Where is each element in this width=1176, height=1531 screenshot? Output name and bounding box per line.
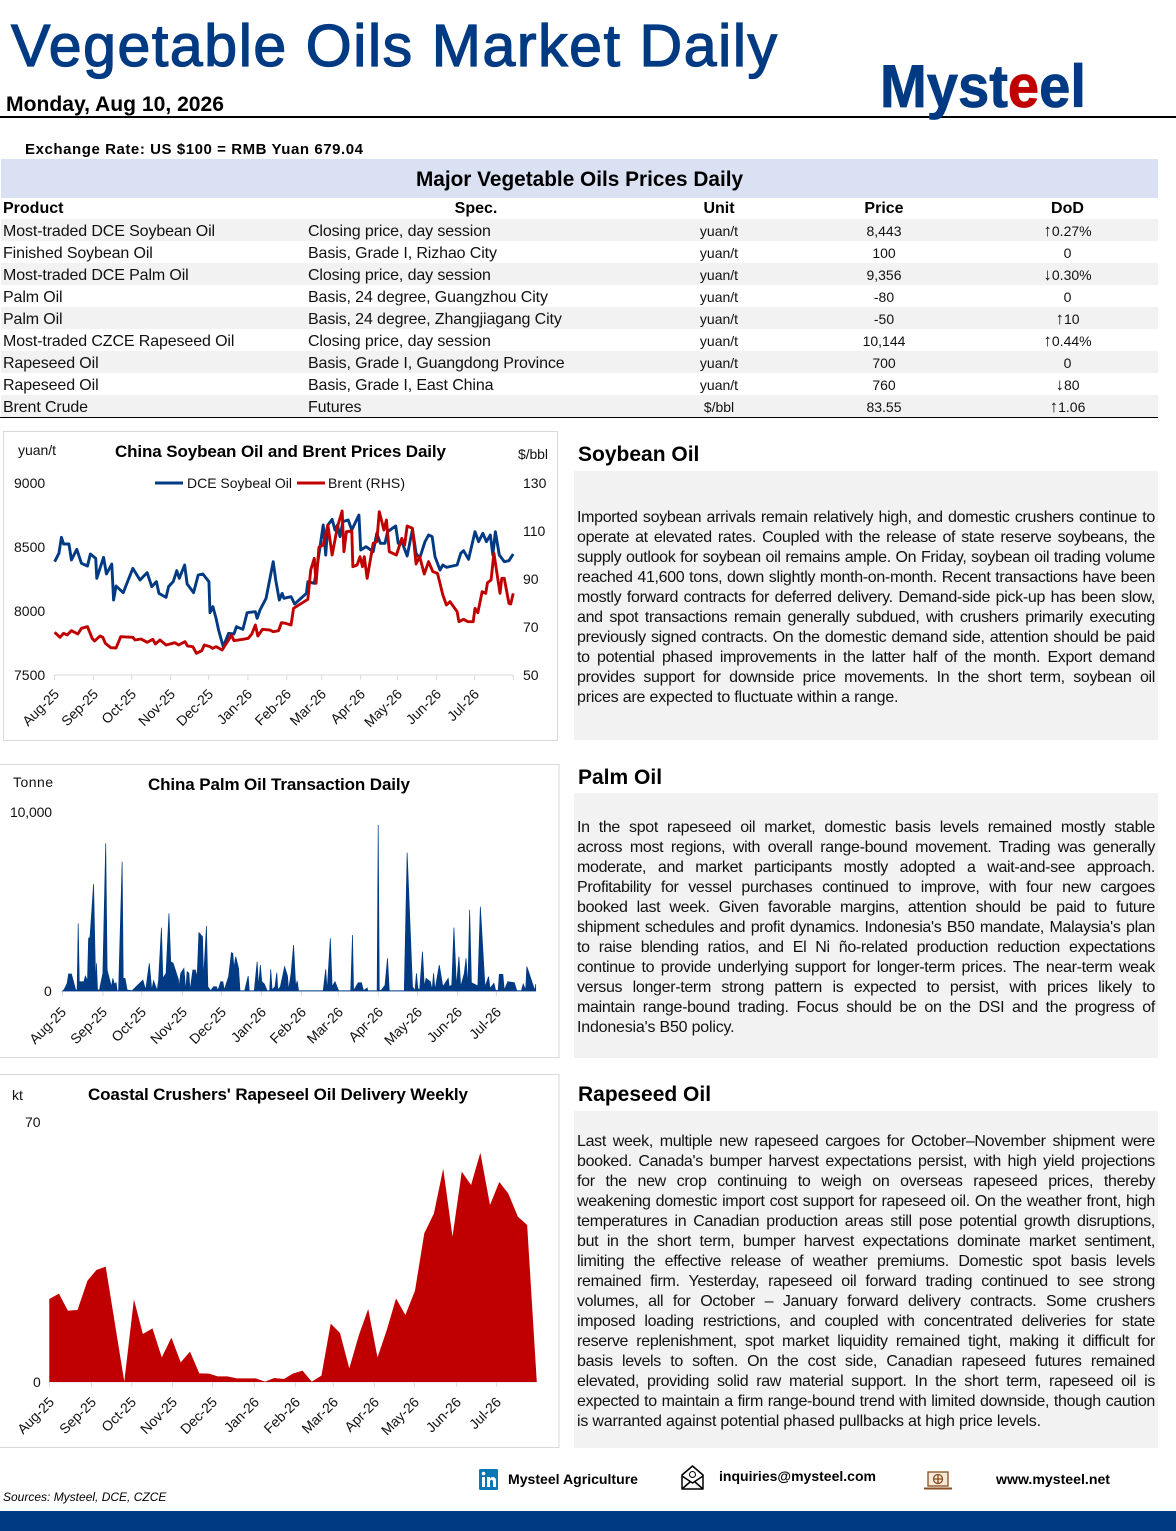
text block: Palm Oil commentary: booked last week. Given favorable margins, attention should be paid to future [577, 899, 1155, 916]
chart: China Palm Oil Transaction Daily [0, 764, 560, 1058]
text block: Soybean Oil commentary: operate at elevated rates. Coupled with the release of state reserve soybeans, the [577, 529, 1155, 546]
text block: Palm Oil commentary: across most regions, with overall range-bound movement. Trading was generally [577, 839, 1155, 856]
footer bar [0, 1511, 1176, 1531]
text block: Palm Oil commentary: continue to provide underlying support for longer-term prices. The near-term weak [577, 959, 1155, 976]
chart: China Soybean Oil and Brent Prices Daily: China Soybean Oil and Brent Prices Daily [115, 442, 447, 461]
text block: Rapeseed Oil commentary: but in the short term, bumper harvest expectations dominate market sentiment, [577, 1233, 1155, 1250]
price table: yuan/t [700, 377, 738, 393]
chart: Coastal Crushers' Rapeseed Oil Delivery Weekly: Jul-26 [466, 1394, 504, 1432]
panel: Palm Oil commentary background [574, 793, 1158, 1058]
chart: China Soybean Oil and Brent Prices Daily: Jan-26 [214, 686, 255, 727]
text block: Soybean Oil commentary: prices are expected to fluctuate within a range. [577, 689, 898, 706]
price table: Basis, Grade I, East China [308, 377, 493, 394]
panel: price table heading [1, 159, 1158, 198]
price table: Spec. [455, 200, 497, 217]
chart: China Soybean Oil and Brent Prices Daily: 130 [523, 475, 547, 491]
chart: Coastal Crushers' Rapeseed Oil Delivery Weekly: kt [12, 1087, 23, 1103]
chart: China Soybean Oil and Brent Prices Daily: Dec-25 [173, 686, 216, 729]
text block: Rapeseed Oil commentary: reserve replenishment, spot market liquidity remained tight, making it difficult for [577, 1333, 1155, 1350]
text: email address: inquiries@mysteel.com [719, 1468, 876, 1484]
header [0, 13, 1176, 120]
price table: 700 [872, 355, 896, 371]
price table: ↑0.27% [1043, 221, 1092, 240]
price table: yuan/t [700, 333, 738, 349]
chart: Coastal Crushers' Rapeseed Oil Delivery Weekly: Dec-25 [177, 1394, 220, 1437]
heading: Palm Oil: Palm Oil [578, 766, 662, 789]
price table: ↑10 [1055, 309, 1080, 328]
price table: Basis, Grade I, Guangdong Province [308, 355, 565, 372]
table bottom rule [0, 417, 1158, 418]
price table: Closing price, day session [308, 267, 491, 284]
sources note: Sources: Mysteel, DCE, CZCE [3, 1490, 166, 1504]
text block: Rapeseed Oil commentary: remained firm. Yesterday, rapeseed oil forward trading continued to see strong [577, 1273, 1155, 1290]
chart: Coastal Crushers' Rapeseed Oil Delivery Weekly [0, 1074, 560, 1448]
text block: Rapeseed Oil commentary: limiting the effective release of weather premiums. Domestic spot basis levels [577, 1253, 1155, 1270]
price table: 0 [1064, 289, 1071, 305]
price table: Most-traded DCE Palm Oil [3, 267, 189, 284]
text block: Soybean Oil commentary: Imported soybean arrivals remain relatively high, and domestic crushers continue to [577, 509, 1155, 526]
chart: China Soybean Oil and Brent Prices Daily: Aug-25 [19, 686, 62, 729]
text block: Palm Oil commentary: versus longer-term strong pattern is expected to persist, with prices likely to [577, 979, 1155, 996]
chart: China Soybean Oil and Brent Prices Daily: Feb-26 [251, 686, 294, 728]
price table: 10,144 [863, 333, 905, 349]
chart: Coastal Crushers' Rapeseed Oil Delivery Weekly: Mar-26 [298, 1394, 341, 1436]
text block: Soybean Oil commentary: to potential phased improvements in the latter half of the month. Export demand [577, 649, 1155, 666]
text block: Palm Oil commentary: Indonesia's B50 policy. [577, 1019, 734, 1036]
price table: ↑0.44% [1043, 331, 1092, 350]
chart: China Palm Oil Transaction Daily: Tonne [13, 774, 53, 790]
text block: Rapeseed Oil commentary: Last week, multiple new rapeseed cargoes for October–November shipment were [577, 1133, 1155, 1150]
price table: 100 [872, 245, 896, 261]
chart: Coastal Crushers' Rapeseed Oil Delivery Weekly: Nov-25 [137, 1394, 180, 1437]
chart: China Soybean Oil and Brent Prices Daily: Jun-26 [403, 686, 444, 727]
price table: 9,356 [866, 267, 902, 283]
panel: Soybean Oil commentary background [574, 471, 1158, 740]
chart: China Palm Oil Transaction Daily: Aug-25 [26, 1004, 69, 1047]
chart: Coastal Crushers' Rapeseed Oil Delivery Weekly: Feb-26 [260, 1394, 303, 1436]
price table: Rapeseed Oil [3, 355, 99, 372]
text block: Soybean Oil commentary: provides support for downside price movements. In the short term, soybean oil [577, 669, 1155, 686]
chart: China Soybean Oil and Brent Prices Daily: Sep-25 [58, 686, 101, 729]
price table: 760 [872, 377, 896, 393]
text block: Palm Oil commentary: Profitability for vessel purchases continued to improve, with four new cargoes [577, 879, 1155, 896]
text block: Palm Oil commentary: to raise blending ratios, and El Ni ño-related production reduction expectations [577, 939, 1155, 956]
price table: yuan/t [700, 289, 738, 305]
price table [1, 200, 1158, 417]
price table: 83.55 [866, 399, 902, 415]
chart: China Soybean Oil and Brent Prices Daily: Mar-26 [286, 686, 329, 728]
text block: Rapeseed Oil commentary: expected to maintain a firm range-bound trend with limited downside, though caution [577, 1393, 1155, 1410]
price table: $/bbl [704, 399, 734, 415]
date: Monday, Aug 10, 2026 [6, 93, 224, 116]
price table: Price [864, 200, 904, 217]
text block: Rapeseed Oil commentary: imposed loading restrictions, and coupled with concentrated deliveries for state [577, 1313, 1155, 1330]
price table: ↓80 [1055, 375, 1080, 394]
price table: yuan/t [700, 223, 738, 239]
chart: China Soybean Oil and Brent Prices Daily: 50 [523, 667, 539, 683]
chart: China Palm Oil Transaction Daily: Feb-26 [266, 1004, 309, 1046]
chart: China Soybean Oil and Brent Prices Daily: May-26 [361, 686, 405, 730]
text block: Rapeseed Oil commentary: volumes, all for October – January forward delivery contracts. Some crushers [577, 1293, 1155, 1310]
price table: ↑1.06 [1050, 397, 1085, 416]
text block: Soybean Oil commentary: supply outlook for soybean oil remains ample. On Friday, soybean oil trading volume [577, 549, 1155, 566]
text: website: www.mysteel.net [995, 1471, 1110, 1487]
chart: China Palm Oil Transaction Daily: Jan-26 [228, 1004, 269, 1045]
chart: Coastal Crushers' Rapeseed Oil Delivery Weekly: May-26 [378, 1394, 422, 1438]
panel: Rapeseed Oil commentary background [574, 1111, 1158, 1448]
text block: Palm Oil commentary: shipment schedules and profit dynamics. Indonesia's B50 mandate, Malaysia's plan [577, 919, 1155, 936]
chart: Coastal Crushers' Rapeseed Oil Delivery Weekly: Apr-26 [341, 1394, 382, 1435]
chart: Coastal Crushers' Rapeseed Oil Delivery Weekly: Jun-26 [423, 1394, 464, 1435]
chart: China Soybean Oil and Brent Prices Daily: Nov-25 [135, 686, 178, 729]
chart: China Palm Oil Transaction Daily: May-26 [381, 1004, 425, 1048]
header rule [0, 116, 1176, 118]
chart: China Palm Oil Transaction Daily: Jul-26 [466, 1004, 504, 1042]
text block: Rapeseed Oil commentary: is warranted against potential phased pullbacks at high price levels. [577, 1413, 1041, 1430]
text block: Palm Oil commentary: moderate, and market participants mostly adopted a wait-and-see approach. [577, 859, 1155, 876]
chart: China Palm Oil Transaction Daily: Sep-25 [67, 1004, 110, 1047]
chart: China Soybean Oil and Brent Prices Daily: 70 [523, 619, 539, 635]
price table: Most-traded CZCE Rapeseed Oil [3, 333, 234, 350]
chart: China Soybean Oil and Brent Prices Daily: 9000 [14, 475, 45, 491]
price table: Brent Crude [3, 399, 88, 416]
footer contacts [479, 1465, 1110, 1490]
price table: yuan/t [700, 311, 738, 327]
price table: yuan/t [700, 355, 738, 371]
price table: Rapeseed Oil [3, 377, 99, 394]
logo: Mysteel: Mysteel [880, 53, 1086, 120]
price table: Palm Oil [3, 311, 62, 328]
price table: Basis, Grade I, Rizhao City [308, 245, 497, 262]
text block: Rapeseed Oil commentary: elevated, providing solid raw material support. In the short term, rapeseed oil is [577, 1373, 1155, 1390]
price table: Unit [703, 200, 735, 217]
text block: Rapeseed Oil commentary: for the new crop continuing to weigh on overseas rapeseed prices, thereby [577, 1173, 1155, 1190]
chart: China Soybean Oil and Brent Prices Daily: yuan/t [18, 442, 56, 458]
chart: China Soybean Oil and Brent Prices Daily: 7500 [14, 667, 45, 683]
text block: Rapeseed Oil commentary [577, 1133, 1156, 1430]
chart: Coastal Crushers' Rapeseed Oil Delivery Weekly: 0 [33, 1374, 41, 1390]
chart: China Soybean Oil and Brent Prices Daily: 8000 [14, 603, 45, 619]
text block: Rapeseed Oil commentary: basis levels to soften. On the cost side, Canadian rapeseed futures remained [577, 1353, 1155, 1370]
price table: -50 [874, 311, 894, 327]
chart: China Palm Oil Transaction Daily: Dec-25 [186, 1004, 229, 1047]
price table: Closing price, day session [308, 223, 491, 240]
price table: yuan/t [700, 245, 738, 261]
chart: China Soybean Oil and Brent Prices Daily: Oct-25 [98, 686, 139, 727]
chart: China Soybean Oil and Brent Prices Daily: Brent (RHS) [328, 475, 405, 491]
price table: Most-traded DCE Soybean Oil [3, 223, 215, 240]
exchange rate: Exchange Rate: US $100 = RMB Yuan 679.04 [25, 141, 364, 158]
chart: China Palm Oil Transaction Daily: Apr-26 [345, 1004, 386, 1045]
price table: Palm Oil [3, 289, 62, 306]
chart: Coastal Crushers' Rapeseed Oil Delivery Weekly: Oct-25 [98, 1394, 139, 1435]
chart: China Palm Oil Transaction Daily: 10,000 [10, 804, 52, 820]
text block: Rapeseed Oil commentary: temperatures in Canadian production areas still pose potential growth disruptions, [577, 1213, 1155, 1230]
chart: China Soybean Oil and Brent Prices Daily: Jul-26 [444, 686, 482, 724]
icon: email envelope [682, 1466, 703, 1489]
text block: Soybean Oil commentary: mostly forward contracts for deferred delivery. Demand-side pick-up has been slow, [577, 589, 1155, 606]
heading: Soybean Oil: Soybean Oil [578, 443, 699, 466]
price table: Futures [308, 399, 361, 416]
text block: Palm Oil commentary [577, 819, 1156, 1036]
price table: Basis, 24 degree, Zhangjiagang City [308, 311, 562, 328]
chart: Coastal Crushers' Rapeseed Oil Delivery Weekly: Jan-26 [221, 1394, 262, 1435]
price table: 0 [1064, 355, 1071, 371]
chart: China Palm Oil Transaction Daily: 0 [44, 983, 52, 999]
chart: China Palm Oil Transaction Daily: China Palm Oil Transaction Daily [148, 775, 411, 794]
heading: Rapeseed Oil: Rapeseed Oil [578, 1083, 711, 1106]
title: Vegetable Oils Market Daily [11, 13, 778, 79]
chart: China Soybean Oil and Brent Prices Daily: DCE Soybeal Oil [187, 475, 292, 491]
text block: Soybean Oil commentary [577, 509, 1155, 706]
icon: laptop with globe [924, 1472, 952, 1488]
text block: Palm Oil commentary: In the spot rapeseed oil market, domestic basis levels remained mostly stable [577, 819, 1155, 836]
chart: Coastal Crushers' Rapeseed Oil Delivery Weekly: Coastal Crushers' Rapeseel Oil Delivery Weekly [88, 1085, 469, 1104]
icon: LinkedIn [479, 1469, 498, 1490]
chart: China Soybean Oil and Brent Prices Daily: 8500 [14, 539, 45, 555]
price table: Product [3, 200, 63, 217]
price table: Finished Soybean Oil [3, 245, 153, 262]
chart: China Soybean Oil and Brent Prices Daily: Apr-26 [327, 686, 368, 727]
chart: China Palm Oil Transaction Daily: Oct-25 [108, 1004, 149, 1045]
chart: Coastal Crushers' Rapeseed Oil Delivery Weekly: Sep-25 [56, 1394, 99, 1437]
price table: 8,443 [866, 223, 902, 239]
chart: China Palm Oil Transaction Daily: Mar-26 [303, 1004, 346, 1046]
chart: China Soybean Oil and Brent Prices Daily: 90 [523, 571, 539, 587]
price table: Basis, 24 degree, Guangzhou City [308, 289, 548, 306]
price table: ↓0.30% [1043, 265, 1092, 284]
price table: yuan/t [700, 267, 738, 283]
chart: China Palm Oil Transaction Daily: Jun-26 [424, 1004, 465, 1045]
chart: China Soybean Oil and Brent Prices Daily: $/bbl [518, 446, 548, 462]
text block: Palm Oil commentary: maintain range-bound trading. Focus should be on the DSI and the progress of [577, 999, 1155, 1016]
chart: China Soybean Oil and Brent Prices Daily: 110 [523, 523, 546, 539]
chart: Coastal Crushers' Rapeseed Oil Delivery Weekly: Aug-25 [14, 1394, 57, 1437]
price table: DoD [1051, 200, 1084, 217]
chart: Coastal Crushers' Rapeseed Oil Delivery Weekly: 70 [25, 1114, 41, 1130]
text block: Soybean Oil commentary: previously signed contracts. On the domestic demand side, attention should be paid [577, 629, 1155, 646]
price table: Closing price, day session [308, 333, 491, 350]
chart: China Palm Oil Transaction Daily: Nov-25 [147, 1004, 190, 1047]
price table: -80 [874, 289, 894, 305]
panel: price table heading: Major Vegetable Oils Prices Daily [416, 168, 743, 191]
text block: Rapeseed Oil commentary: weakening domestic import cost support for rapeseed oil. On the weather front, high [577, 1193, 1155, 1210]
chart: China Soybean Oil and Brent Prices Daily [3, 431, 558, 741]
text block: Soybean Oil commentary: and spot transactions remain generally subdued, with crushers primarily executing [577, 609, 1155, 626]
text block: Soybean Oil commentary: reached 41,600 tons, down slightly month-on-month. Recent transactions have been [577, 569, 1155, 586]
text: LinkedIn name: Mysteel Agriculture [508, 1471, 638, 1487]
price table: 0 [1064, 245, 1071, 261]
text block: Rapeseed Oil commentary: booked. Canada's bumper harvest expectations persist, with high yield projections [577, 1153, 1155, 1170]
